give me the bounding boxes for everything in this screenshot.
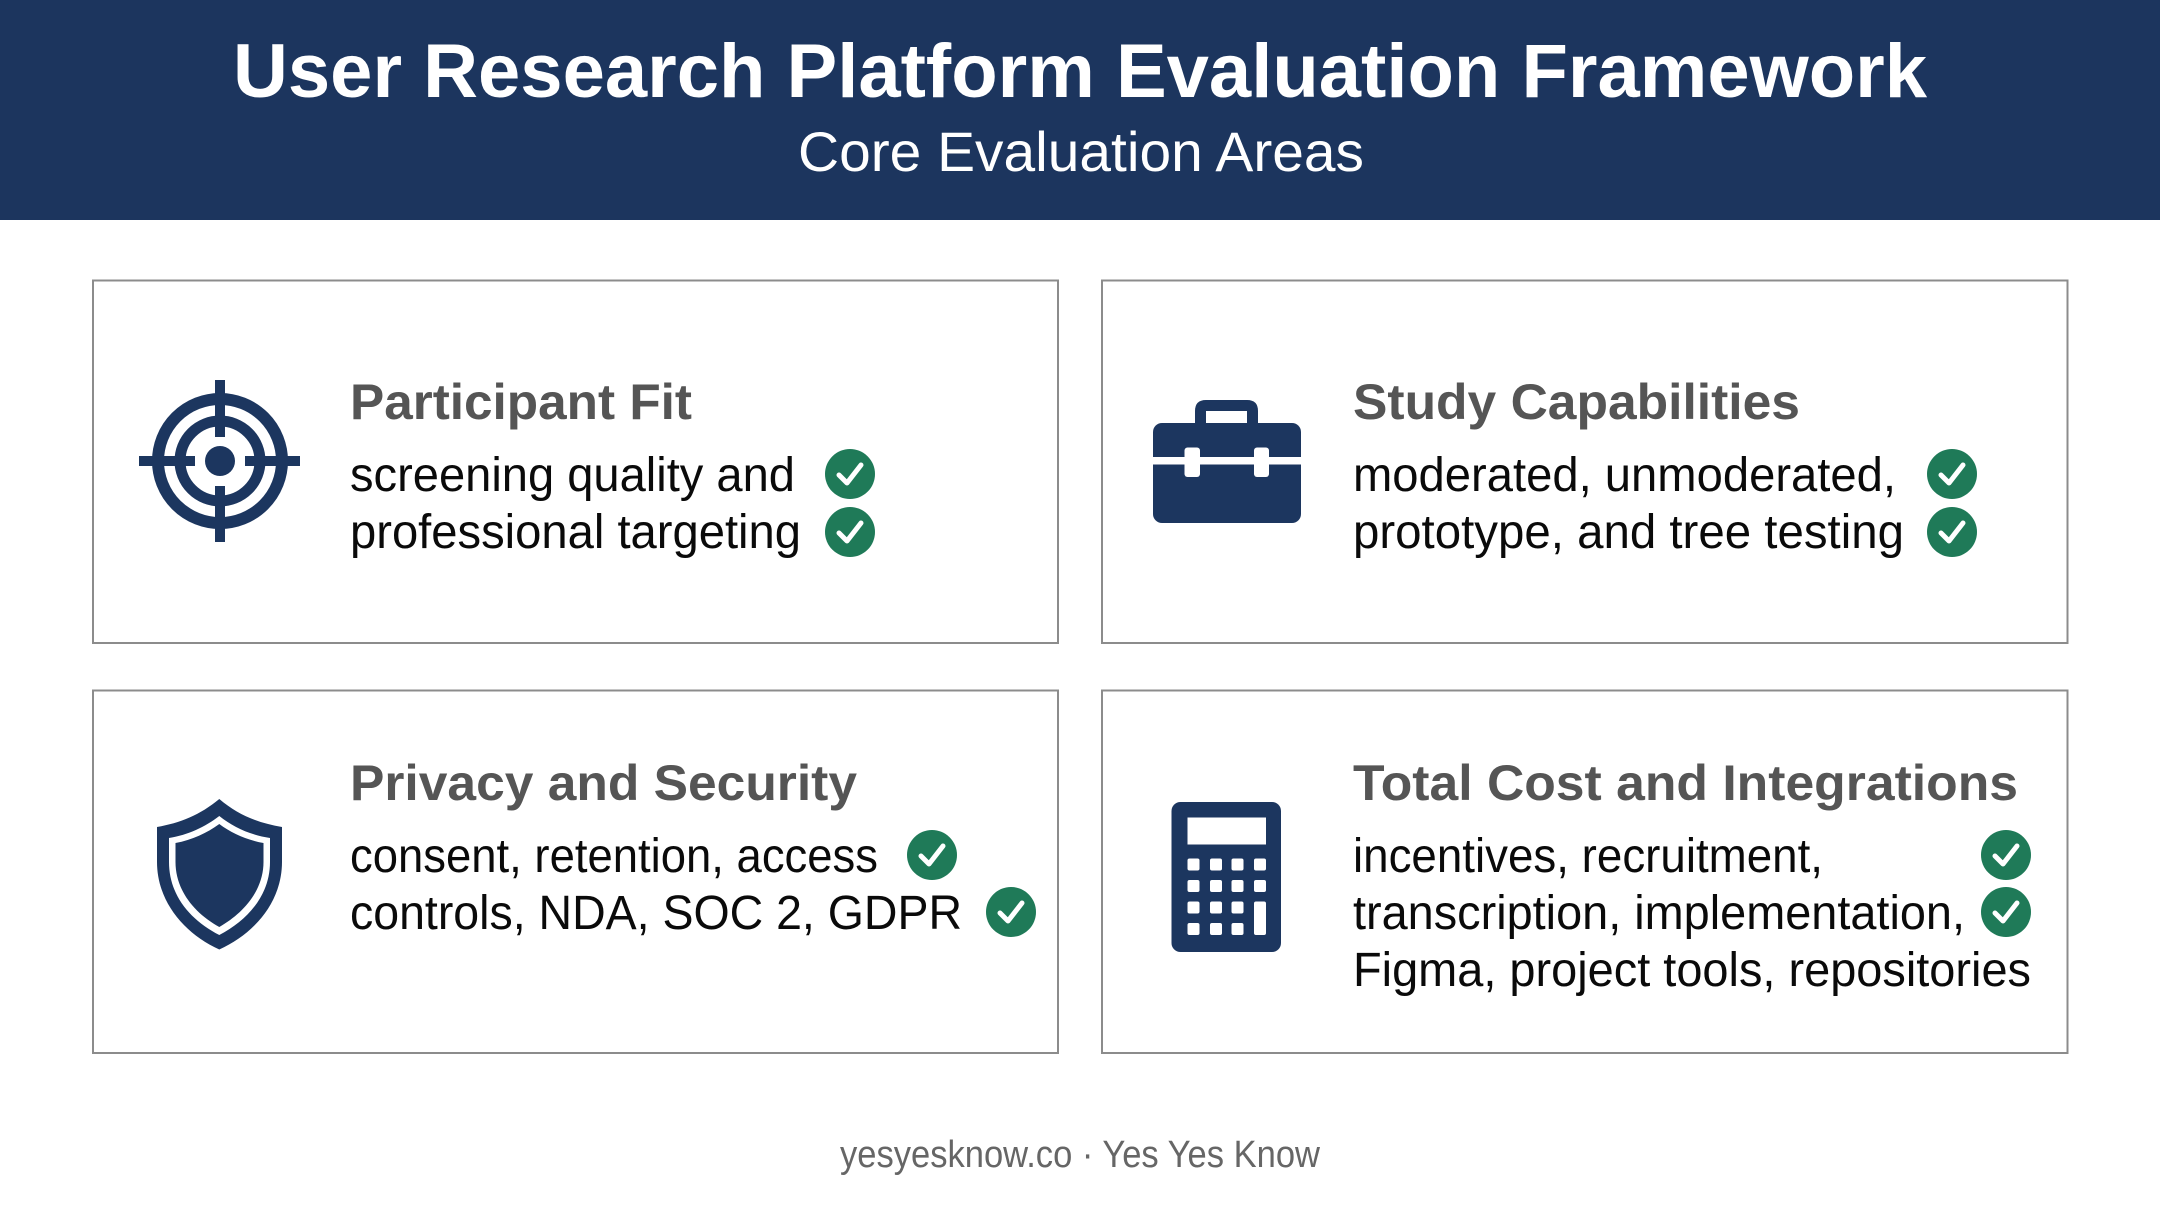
icon: briefcase — [1153, 400, 1301, 523]
heading: Study Capabilities — [1353, 374, 1800, 430]
description line 1: consent, retention, access — [350, 830, 878, 883]
icon: target — [139, 380, 300, 542]
check icon 2 — [986, 887, 1036, 937]
description line 1: moderated, unmoderated, — [1353, 449, 1896, 502]
description line 3: Figma, project tools, repositories — [1353, 944, 2031, 997]
heading: Privacy and Security — [350, 755, 857, 811]
check icon 2 — [825, 507, 875, 557]
check icon 1 — [1981, 830, 2031, 880]
panel: privacy and security — [93, 690, 1058, 1053]
icon: shield — [157, 799, 282, 950]
panel: participant fit — [93, 280, 1058, 643]
description line 2: controls, NDA, SOC 2, GDPR — [350, 887, 962, 940]
description line 2: transcription, implementation, — [1353, 887, 1965, 940]
header banner — [0, 0, 2160, 220]
description line 1: incentives, recruitment, — [1353, 830, 1823, 883]
title: User Research Platform Evaluation Framework — [233, 29, 1928, 114]
description line 1: screening quality and — [350, 449, 795, 502]
panel: total cost and integrations — [1102, 690, 2068, 1053]
check icon 2 — [1981, 887, 2031, 937]
check icon 1 — [907, 830, 957, 880]
subtitle: Core Evaluation Areas — [798, 120, 1364, 183]
check icon 1 — [1927, 449, 1977, 499]
heading: Total Cost and Integrations — [1353, 755, 2018, 811]
check icon 2 — [1927, 507, 1977, 557]
panel: study capabilities — [1102, 280, 2068, 643]
footer: yesyesknow.co · Yes Yes Know — [840, 1134, 1321, 1176]
check icon 1 — [825, 449, 875, 499]
icon: calculator — [1172, 802, 1281, 952]
heading: Participant Fit — [350, 374, 692, 430]
description line 2: prototype, and tree testing — [1353, 506, 1904, 559]
description line 2: professional targeting — [350, 506, 801, 559]
